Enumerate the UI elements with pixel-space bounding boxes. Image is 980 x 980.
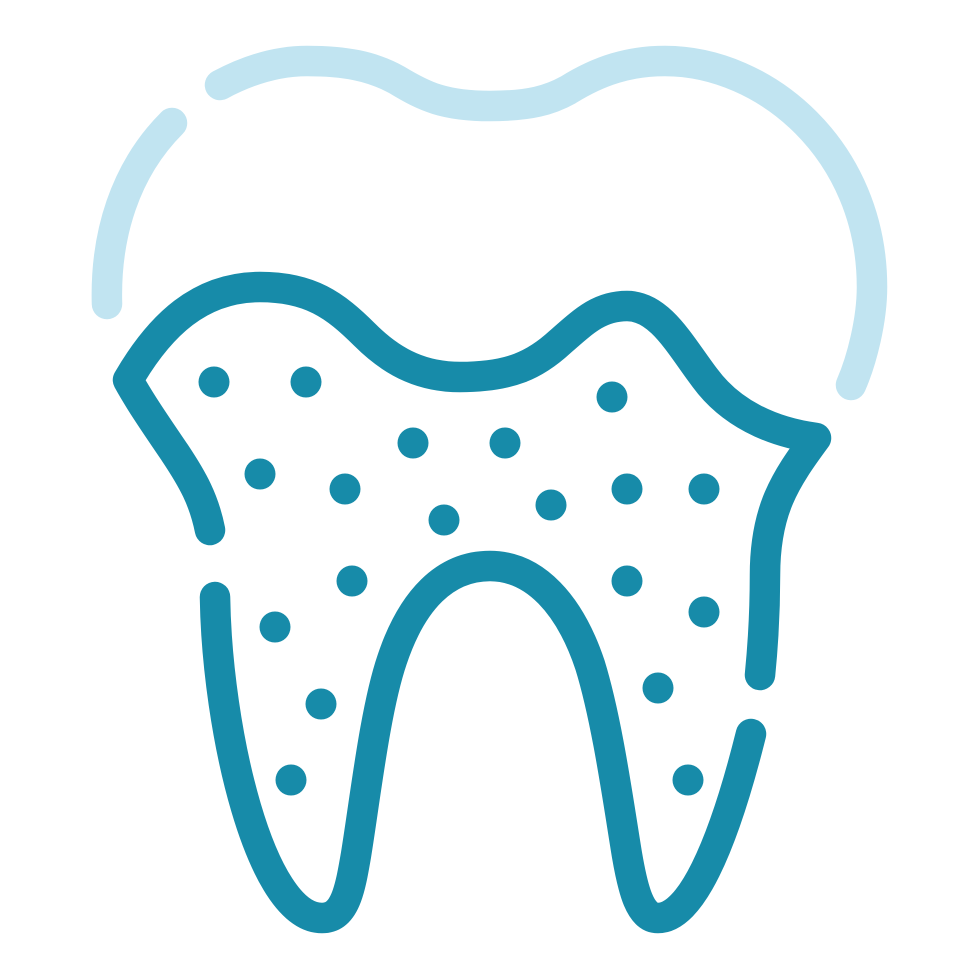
tooth body: upper outline [128,287,816,675]
icon: tooth [107,61,872,918]
dots: decay spots [198,366,720,796]
tooth body: lower outline with roots [215,566,751,918]
crown outline: top and right arc [220,61,872,385]
crown outline: left arc [107,123,172,304]
